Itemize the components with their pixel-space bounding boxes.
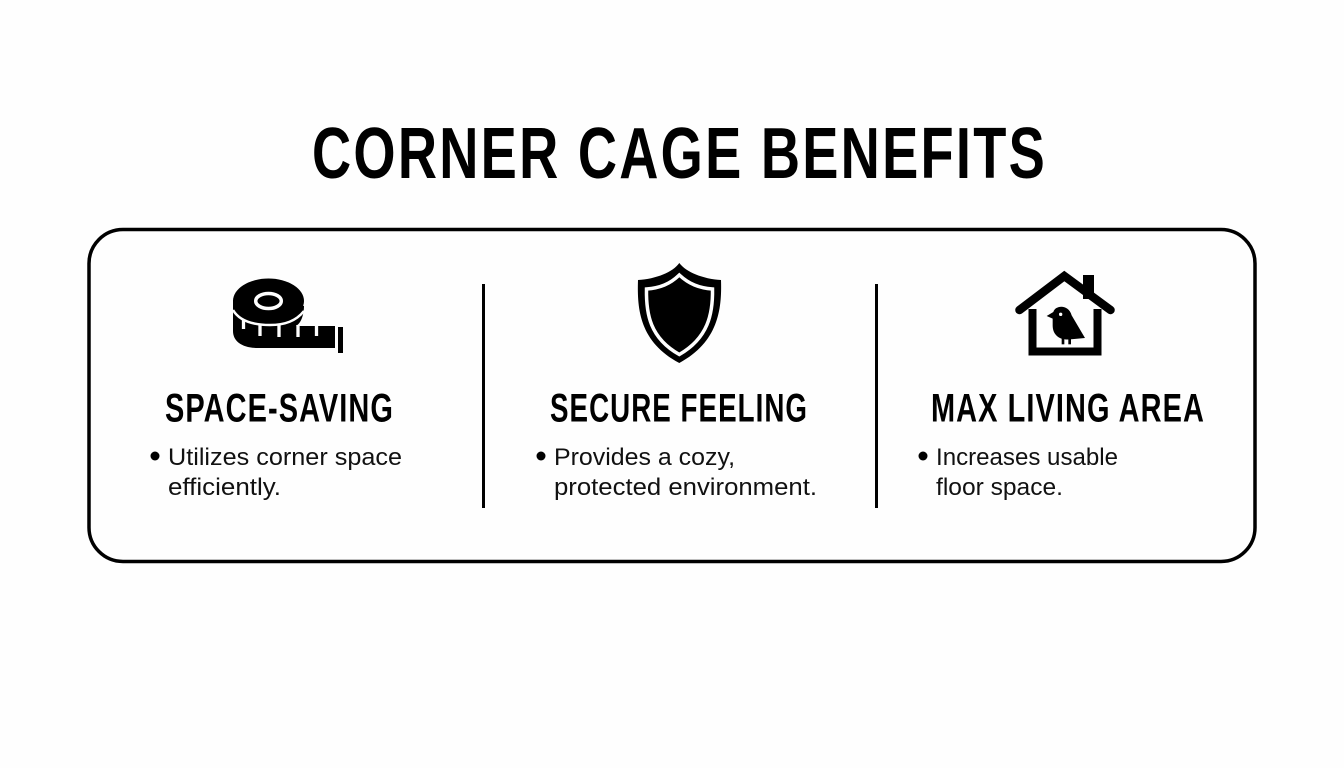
- text block: max living area: floor space.: [936, 474, 1063, 501]
- text block: secure feeling: [536, 444, 817, 501]
- text block: secure feeling: protected environment.: [554, 474, 817, 501]
- text block: max living area: Increases usable: [936, 444, 1118, 471]
- icon: measuring tape: [233, 278, 343, 353]
- text block: secure feeling: Provides a cozy,: [554, 444, 735, 471]
- text block: space-saving: [150, 444, 402, 501]
- title: CORNER CAGE BENEFITS: [312, 114, 1047, 194]
- text block: space-saving: efficiently.: [168, 474, 281, 501]
- text block: space-saving: Utilizes corner space: [168, 444, 402, 471]
- icon: house with bird: [1020, 275, 1110, 352]
- icon: shield: [638, 263, 721, 363]
- text block: max living area: [918, 444, 1118, 501]
- heading: max living area: MAX LIVING AREA: [931, 386, 1205, 430]
- heading: space-saving: SPACE-SAVING: [165, 386, 394, 430]
- heading: secure feeling: SECURE FEELING: [550, 386, 808, 430]
- panel: benefits: [89, 230, 1255, 562]
